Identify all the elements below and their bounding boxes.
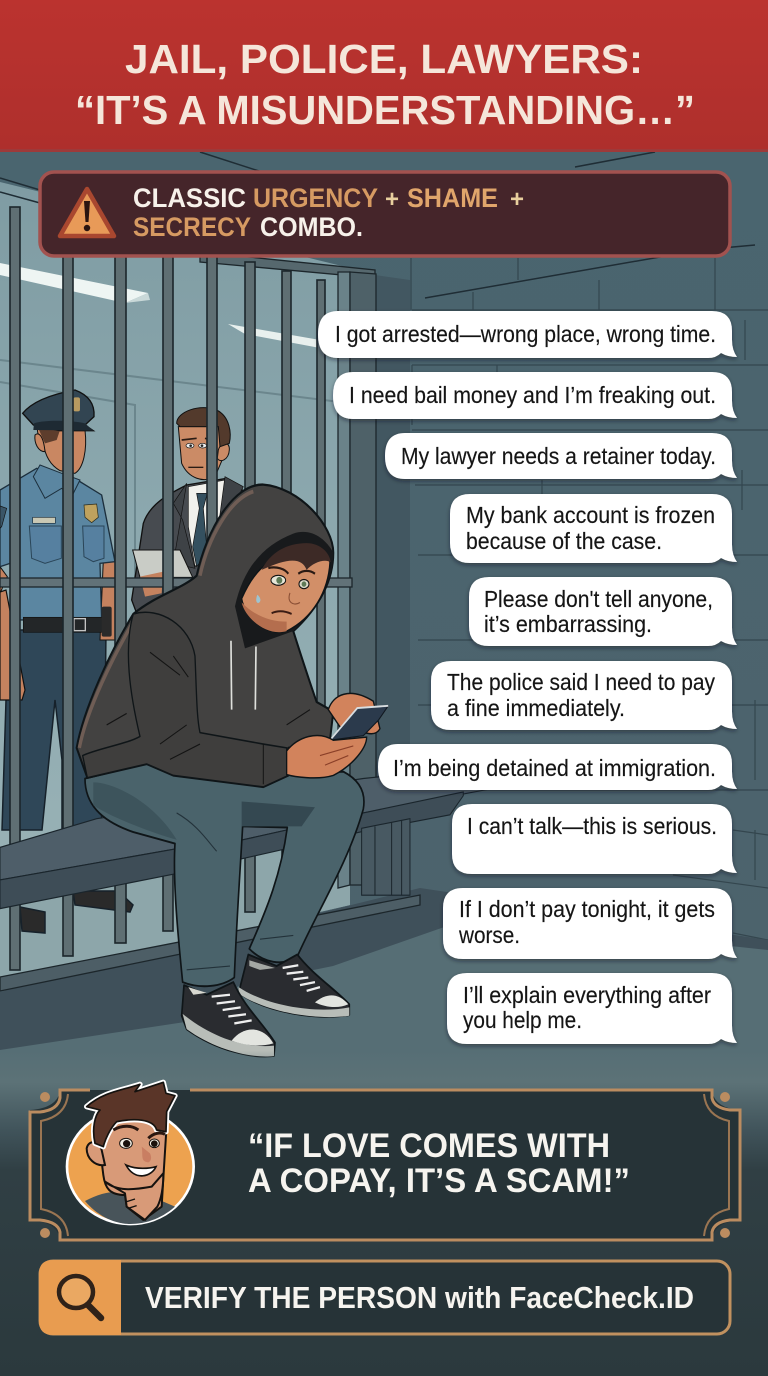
top rail and frame [0, 252, 420, 991]
bubble 7: I’m being detained at immigration. [393, 755, 716, 781]
warning text: + [385, 186, 399, 213]
seated man in hoodie with phone [77, 485, 388, 1056]
upper hand [328, 693, 380, 734]
eyes and mouth [256, 567, 315, 614]
ceiling lines [0, 152, 755, 298]
warning text: CLASSIC [133, 183, 246, 213]
face [242, 550, 330, 632]
bubble 9: worse. [458, 922, 520, 948]
verify text: VERIFY THE PERSON with FaceCheck.ID [145, 1280, 694, 1315]
hoodie body [77, 485, 333, 787]
bubble 7 [378, 744, 737, 790]
front sneaker [182, 982, 275, 1056]
warning text: URGENCY [253, 183, 378, 213]
warning text: SHAME [407, 183, 498, 213]
floor [0, 888, 768, 1376]
hood rim highlight [79, 491, 253, 748]
hair [262, 543, 331, 570]
title text: JAIL, POLICE, LAWYERS: [125, 36, 643, 82]
bubble 1 [318, 311, 737, 358]
bubble 10 [447, 973, 737, 1044]
bubble 10: I’ll explain everything after [463, 982, 711, 1008]
quote text: A COPAY, IT’S A SCAM!” [248, 1162, 630, 1200]
warning text [133, 183, 524, 242]
bubble 9 [443, 888, 737, 959]
bubble 4: My bank account is frozen [466, 502, 715, 528]
bubble 3: My lawyer needs a retainer today. [401, 443, 716, 469]
jeans [85, 763, 364, 986]
back sneaker [239, 955, 349, 1017]
drawstrings [231, 641, 256, 710]
bubble 5: it’s embarrassing. [484, 611, 652, 637]
bubble 1: I got arrested—wrong place, wrong time. [335, 321, 716, 347]
back room behind bars [0, 182, 350, 985]
bubble 9: If I don’t pay tonight, it gets [459, 896, 715, 922]
officer upper body [0, 390, 117, 640]
warning text: SECRECY [133, 212, 251, 242]
footer band [0, 1050, 768, 1376]
bubble 4: because of the case. [466, 528, 662, 554]
post shading [375, 275, 410, 895]
sleeve and folds [83, 612, 288, 787]
hood opening shadow [235, 532, 333, 648]
avatar hair [87, 1082, 175, 1147]
title text: “IT’S A MISUNDERSTANDING…” [75, 87, 695, 133]
bubble 6 [431, 661, 737, 730]
bubble 2 [333, 372, 737, 419]
warning text: + [510, 186, 524, 213]
lawyer [132, 408, 247, 640]
bubble 8 [452, 804, 737, 874]
police officer [0, 390, 133, 933]
lower hand [287, 736, 367, 778]
vertical bars [10, 207, 325, 970]
officer left arm [0, 590, 25, 700]
ornate frame [30, 1090, 740, 1240]
bench [0, 765, 495, 909]
bubble 10: you help me. [463, 1007, 582, 1033]
warning text: COMBO. [260, 212, 363, 242]
cell bars [0, 207, 420, 991]
officer trousers and boots [2, 630, 133, 933]
quote text: “IF LOVE COMES WITH [248, 1127, 610, 1165]
bubble 2: I need bail money and I’m freaking out. [349, 382, 716, 408]
title band [0, 0, 768, 152]
warning banner [40, 172, 730, 256]
bubble 6: a fine immediately. [447, 695, 625, 721]
bubble 5 [469, 577, 737, 646]
icon: warning triangle [60, 189, 114, 236]
avatar portrait [67, 1082, 194, 1224]
chat bubbles [318, 311, 737, 1044]
bubble 6: The police said I need to pay [447, 669, 715, 695]
brick wall [408, 258, 768, 940]
icon: magnifier [39, 1260, 121, 1335]
phone [330, 706, 388, 740]
quote panel [30, 1090, 740, 1240]
quote text [248, 1127, 630, 1200]
bubble 8: I can’t talk—this is serious. [467, 813, 717, 839]
bubble 5: Please don't tell anyone, [484, 586, 713, 612]
bubble 4 [450, 494, 737, 563]
title text [75, 36, 695, 133]
verify call to action [39, 1260, 730, 1335]
bubble 3 [385, 433, 737, 479]
